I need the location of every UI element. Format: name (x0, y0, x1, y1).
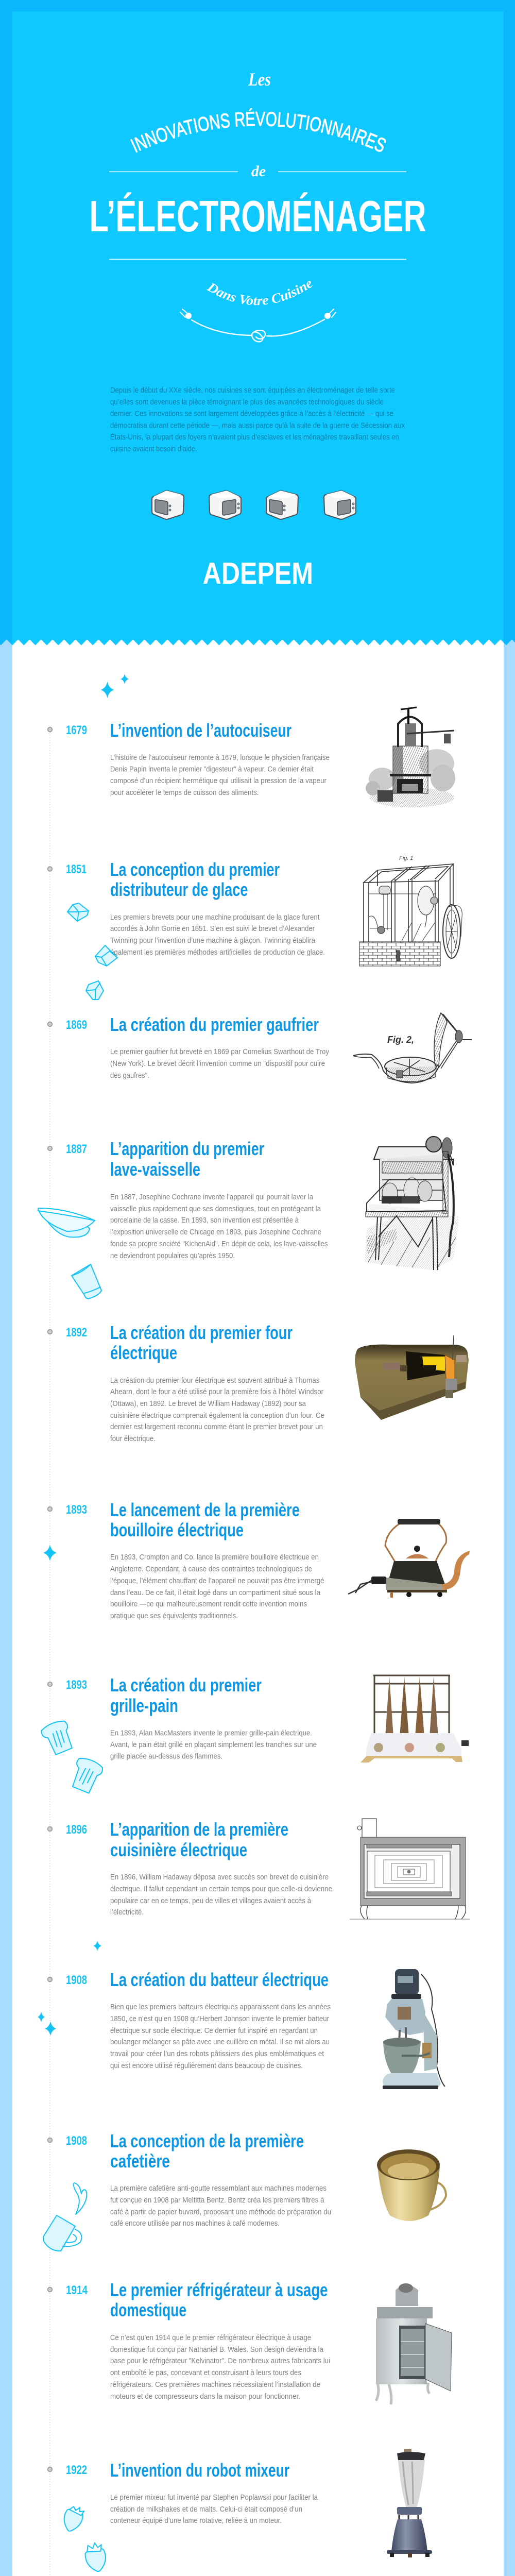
text: Le premier mixeur fut inventé par Stephen Poplawski pour faciliter la (110, 2494, 318, 2502)
entry: 1892 (48, 1322, 469, 1443)
heading: cafetière (110, 2150, 170, 2172)
icon: glass (72, 1264, 101, 1299)
text: dans l’eau. De ce fait, il était logé dans un compartiment situé sous la (110, 1589, 321, 1597)
heading: Le lancement de la première (110, 1499, 300, 1520)
text (110, 1553, 324, 1620)
intro text: démocratisa durant cette période —, mais aussi parce qu’à la suite de la guerre de Sécession aux (110, 422, 405, 430)
icon: coffee cup (43, 2215, 81, 2251)
entry: 1869 (48, 1013, 472, 1083)
timeline dot (48, 727, 52, 732)
divider bottom (109, 259, 406, 260)
text (110, 1729, 317, 1761)
intro text: qu’elles sont devenues la pièce témoignant le plus des avancées technologiques du siècle (110, 398, 384, 406)
icon: strawberry 2 (83, 2541, 108, 2573)
image: stand mixer (383, 1969, 445, 2089)
image: electric oven (355, 1335, 469, 1420)
timeline dot (48, 1146, 52, 1150)
text: l’exposition universelle de Chicago en 1893, puis Josephine Cochrane (110, 1228, 321, 1236)
image: electric kettle (348, 1519, 470, 1598)
text: Denis Papin inventa le premier "digesteur" à vapeur. Ce dernier était (110, 766, 314, 774)
heading: La conception de la première (110, 2130, 304, 2151)
text: (New York). Le brevet décrit l’invention comme un "dispositif pour cuire (110, 1060, 325, 1068)
intro text (110, 386, 405, 453)
entry: 1893 kettle (43, 1499, 470, 1620)
heading (110, 1819, 288, 1860)
text (110, 754, 330, 797)
image: ice machine patent (359, 855, 462, 966)
heading: La création du premier four (110, 1322, 293, 1343)
text: fut conçue en 1908 par Meltitta Bentz. Bentz créa les premiers filtres à (110, 2196, 324, 2205)
text: cuisinière électrique comprenait également la conception d’un four. Ce (110, 1412, 324, 1420)
text (110, 2003, 331, 2070)
image: pressure cooker engraving (366, 707, 455, 807)
year: 1908 (66, 2134, 87, 2148)
year: 1893 (66, 1678, 87, 1692)
heading (110, 1322, 293, 1363)
timeline dot (48, 1827, 52, 1831)
image: blender (387, 2449, 432, 2557)
text: La première cafetière anti-goutte ressemblant aux machines modernes (110, 2184, 327, 2193)
text: ne deviendront populaires qu’après 1950. (110, 1252, 235, 1260)
timeline line (49, 730, 50, 2576)
entry: 1893 toaster (40, 1674, 469, 1795)
heading: distributeur de glace (110, 879, 248, 900)
text: électrique sur socle électrique. Ce dernier fut inspiré en regardant un (110, 2027, 318, 2035)
icon: sparkles (38, 2012, 56, 2036)
text: grille placée au-dessus des flammes. (110, 1753, 222, 1761)
text: des gaufres". (110, 1072, 149, 1080)
text (110, 913, 325, 957)
heading (110, 1499, 300, 1540)
heading (110, 2279, 328, 2320)
heading (110, 1138, 264, 1180)
icon: ice cube 1 (67, 903, 89, 921)
timeline dot (48, 1507, 52, 1511)
year: 1914 (66, 2283, 88, 2297)
title: Les: Les (248, 69, 271, 90)
year: 1887 (66, 1142, 87, 1156)
year: 1896 (66, 1823, 87, 1837)
text (110, 1193, 328, 1260)
text: café encore utilisée par nos machines à café modernes. (110, 2219, 280, 2228)
icon: ice cube 2 (95, 945, 117, 966)
year: 1851 (66, 862, 87, 876)
intro text: Depuis le début du XXe siècle, nos cuisines se sont équipées en électroménager de telle sorte (110, 386, 395, 395)
text: 1850, ce n’est qu’en 1908 qu’Herbert Johnson invente le premier batteur (110, 2015, 329, 2023)
entry: 1679 (48, 707, 455, 807)
intro text: États-Unis, la plupart des foyers n’avaient plus d’esclaves et les ménagères travaillant seules en (110, 433, 399, 442)
text: domestique fut conçu par Nathaniel B. Wales. Son design deviendra la (110, 2346, 324, 2354)
image: waffle iron patent: Fig. 2, (387, 1035, 414, 1045)
heading: Le premier réfrigérateur à usage (110, 2279, 328, 2300)
zigzag top edge (0, 639, 515, 645)
text: bouilloire —ce qui malheureusement rendit cette invention moins (110, 1600, 307, 1608)
text: accordés à John Gorrie en 1851. S’en est suivi le brevet d’Alexander (110, 925, 315, 933)
heading: L’invention du robot mixeur (110, 2460, 289, 2481)
text (110, 2184, 331, 2228)
timeline dot (48, 867, 52, 871)
divider left (109, 171, 238, 172)
text: dernier est largement reconnu comme étant le premier brevet pour un (110, 1423, 323, 1431)
text: boulanger mélanger sa pâte avec une cuillère en métal. Il se mit alors au (110, 2038, 330, 2046)
divider right (278, 171, 406, 172)
heading (110, 2130, 304, 2172)
icon: sparkle (93, 1941, 101, 1951)
text (110, 1873, 332, 1917)
text: En 1893, Crompton and Co. lance la première bouilloire électrique en (110, 1553, 319, 1562)
text: travail pour créer l’un des robots pâtissiers des plus emblématiques et (110, 2050, 324, 2058)
text: four électrique. (110, 1435, 156, 1443)
entry: 1887 (38, 1137, 458, 1299)
entry: 1922 (48, 2449, 432, 2573)
text: ont emboîté le pas, concevant et construisant à leurs tours des (110, 2369, 301, 2377)
text: café à partir de papier buvard, proposant une méthode de préparation du (110, 2208, 331, 2216)
text (110, 1048, 330, 1080)
year: 1908 (66, 1973, 87, 1987)
timeline dot (48, 1330, 52, 1334)
side band left (0, 640, 12, 2576)
year: 1892 (66, 1326, 87, 1340)
icon: sparkles top (101, 674, 129, 698)
image: stove patent diagram (350, 1819, 470, 1919)
title: de: de (251, 163, 266, 180)
side band right (504, 640, 515, 2576)
heading: domestique (110, 2299, 186, 2320)
text: L’histoire de l’autocuiseur remonte à 1679, lorsque le physicien française (110, 754, 330, 762)
intro text: dernier. Ces innovations se sont largement développées grâce à l’accès à l’électricité — qui se (110, 410, 393, 418)
text: fonde sa propre société "KichenAid". En dépit de cela, les lave-vaisselles (110, 1240, 328, 1248)
text: populaire car en ce temps, peu de villes et villages avaient accès à (110, 1897, 312, 1905)
text: vaisselle plus rapidement que ses domestiques, tout en protégeant la (110, 1205, 321, 1213)
year: 1922 (66, 2463, 87, 2477)
text: Ce n’est qu’en 1914 que le premier réfrigérateur électrique à usage (110, 2334, 311, 2342)
text: Avant, le pain était grillé en plaçant simplement les tranches sur une (110, 1741, 317, 1749)
heading: L’apparition du premier (110, 1138, 264, 1159)
text: composé d’un récipient hermétique qui utilisait la pression de la vapeur (110, 777, 327, 785)
timeline dot (48, 2138, 52, 2142)
panel: header (0, 0, 515, 640)
image: early refrigerator (376, 2283, 452, 2404)
icon: toast 1 (40, 1718, 76, 1757)
text: Angleterre. Cependant, à cause des contraintes technologiques de (110, 1565, 312, 1573)
icon: strawberry 1 (60, 2504, 85, 2534)
text (110, 2494, 318, 2525)
image: ice machine patent: Fig. 1 (399, 855, 414, 861)
entry: 1851 (48, 855, 462, 999)
text: l’électricité. (110, 1908, 144, 1917)
year: 1869 (66, 1018, 87, 1032)
title: innovations révolutionnaires: INNOVATIONS RÉVOLUTIONNAIRES (130, 108, 386, 152)
heading: électrique (110, 1342, 177, 1363)
icon: sparkle (43, 1545, 57, 1561)
heading: La création du premier gaufrier (110, 1014, 319, 1035)
text: conteneur équipé d’une lame rotative, reliée à un moteur. (110, 2517, 282, 2525)
intro text: cuisine avaient besoin d’aide. (110, 445, 197, 453)
logo: adepem: ADEPEM (203, 556, 313, 590)
text: Les premiers brevets pour une machine produisant de la glace furent (110, 913, 319, 922)
text: également les premières méthodes artificielles de production de glace. (110, 948, 325, 957)
image: toaster (360, 1675, 469, 1762)
text (110, 2334, 330, 2401)
icons: microwaves (152, 491, 356, 519)
heading: L’invention de l’autocuiseur (110, 720, 291, 741)
icon: steam (74, 2183, 87, 2214)
text: Ahearn, dont le four a été utilisé pour la première fois à l’hôtel Windsor (110, 1388, 323, 1396)
entry: 1908 mixer (38, 1969, 445, 2089)
heading (110, 1674, 262, 1716)
image: gold mug (377, 2149, 446, 2221)
heading: lave-vaisselle (110, 1159, 200, 1180)
subtitle: dans votre cuisine: Dans Votre Cuisine (206, 281, 313, 305)
text: En 1887, Josephine Cochrane invente l’appareil qui pourrait laver la (110, 1193, 314, 1201)
text: Twinning pour l’invention d’une machine à glaçon. Twinning établira (110, 937, 316, 945)
text: Le premier gaufrier fut breveté en 1869 par Cornelius Swarthout de Troy (110, 1048, 330, 1056)
text: pratique que ses équivalents traditionnels. (110, 1612, 238, 1620)
year: 1893 (66, 1503, 87, 1517)
icon: cord with plugs and knot (180, 309, 336, 342)
timeline dot (48, 1977, 52, 1981)
image: dishwasher engraving (365, 1137, 458, 1270)
heading: cuisinière électrique (110, 1839, 247, 1860)
text: En 1893, Alan MacMasters invente le premier grille-pain électrique. (110, 1729, 312, 1737)
timeline dot (48, 1682, 52, 1686)
text: électrique. Il fallut cependant un certain temps pour que celle-ci devienne (110, 1885, 332, 1893)
text: Bien que les premiers batteurs électriques apparaissent dans les années (110, 2003, 331, 2011)
icon: toast 2 (68, 1756, 105, 1795)
text: pour accélérer le temps de cuisson des aliments. (110, 789, 259, 797)
text: base pour le réfrigérateur "Kelvinator". De nombreux autres fabricants lui (110, 2357, 330, 2365)
icon: bowls (38, 1208, 95, 1237)
timeline dot (48, 2467, 52, 2471)
heading: La conception du premier (110, 859, 280, 880)
text: réfrigérateurs. Ces premières machines nécessitaient l’installation de (110, 2381, 320, 2389)
text: En 1896, William Hadaway déposa avec succès son brevet de cuisinière (110, 1873, 329, 1882)
text: qui est encore utilisé régulièrement dans beaucoup de cuisines. (110, 2062, 303, 2070)
text: moteurs et de compresseurs dans la maison pour fonctionner. (110, 2393, 300, 2401)
text: création de milkshakes et de malts. Celui-ci était composé d’un (110, 2505, 302, 2514)
text (110, 1377, 324, 1443)
image: waffle iron patent (353, 1013, 472, 1083)
heading: bouilloire électrique (110, 1519, 244, 1540)
timeline dot (48, 1022, 52, 1026)
heading (110, 859, 280, 900)
text: La création du premier four électrique est souvent attribué à Thomas (110, 1377, 319, 1385)
entry: 1908 coffee (43, 2130, 446, 2251)
text: l’époque, l’élément chauffant de l’appareil ne pouvait pas être immergé (110, 1577, 324, 1585)
year: 1679 (66, 723, 87, 737)
text: (Ottawa), en 1892. Le brevet de William Hadaway (1892) pour sa (110, 1400, 306, 1408)
heading: grille-pain (110, 1695, 178, 1716)
text: porcelaine de la casse. En 1893, son invention est présentée à (110, 1216, 299, 1225)
heading: La création du batteur électrique (110, 1969, 329, 1990)
heading: La création du premier (110, 1674, 262, 1696)
entry: 1896 (48, 1819, 470, 1919)
timeline dot (48, 2287, 52, 2292)
heading: L’apparition de la première (110, 1819, 288, 1840)
icon: ice cube 3 (86, 981, 104, 999)
entry: 1914 (48, 2279, 452, 2404)
